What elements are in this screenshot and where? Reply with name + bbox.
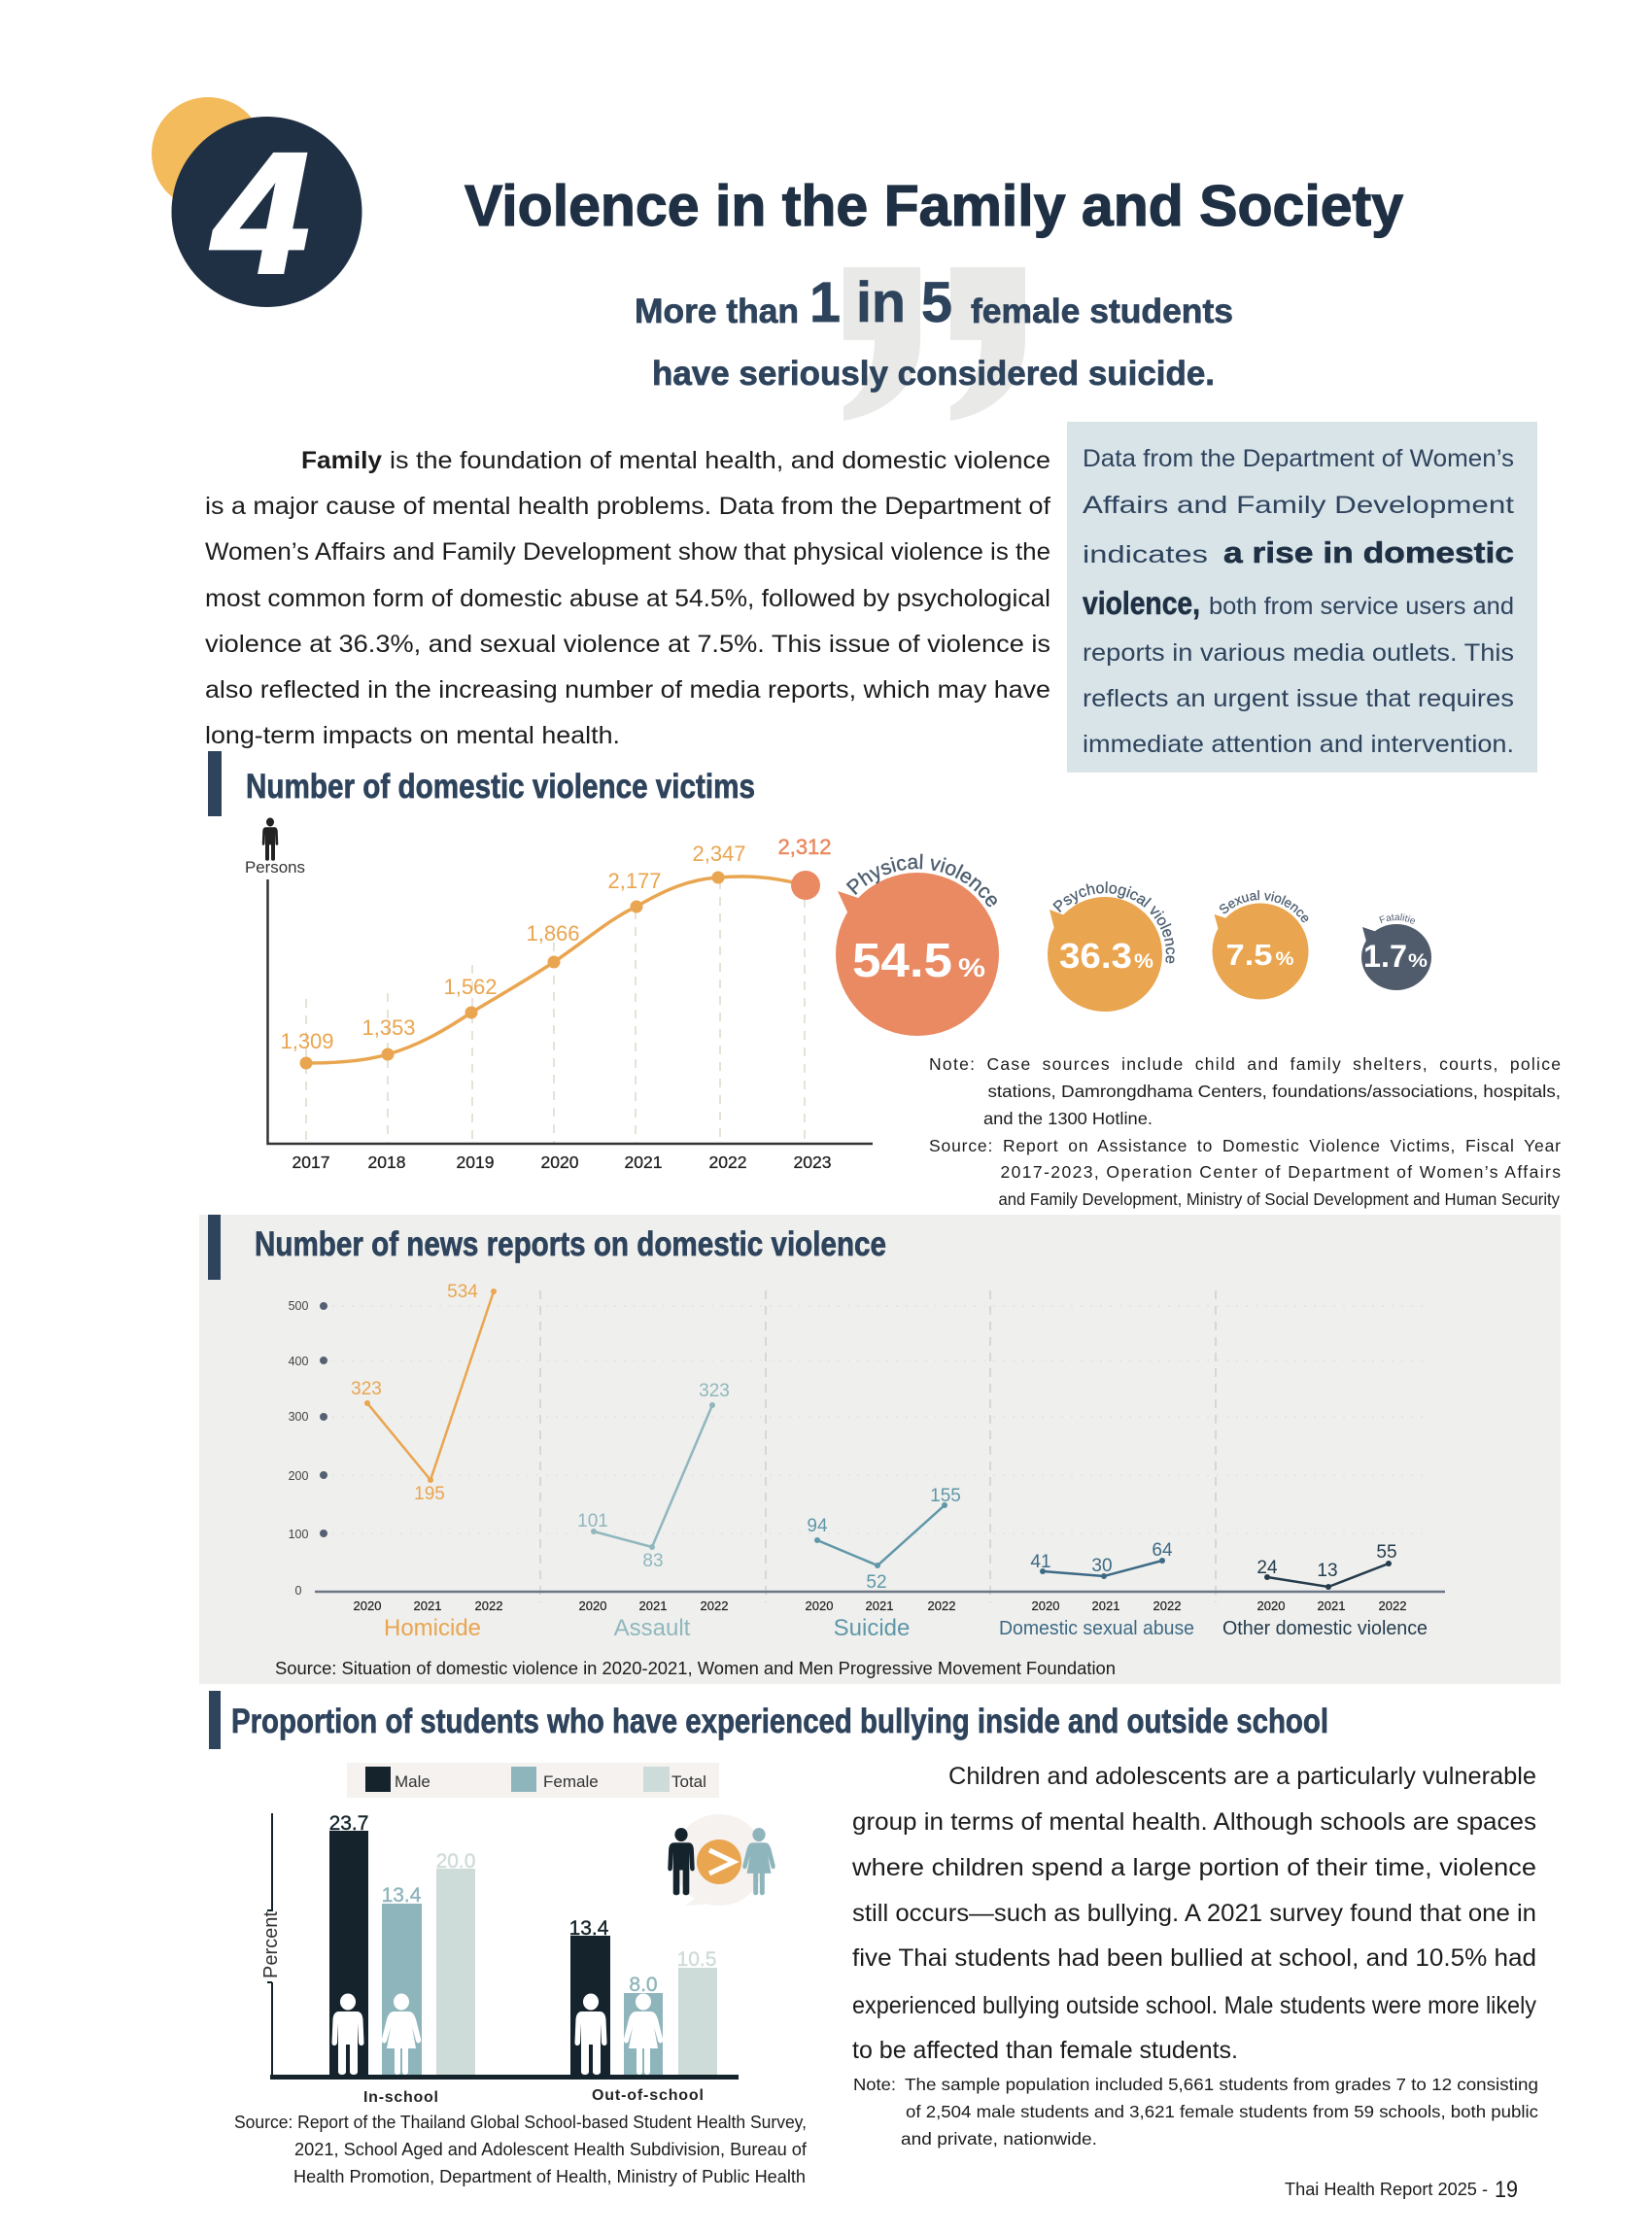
intro paragraph: Family bbox=[301, 447, 382, 474]
bubble: fatalities bbox=[1361, 913, 1431, 990]
paragraph: bullying bbox=[851, 1763, 1536, 2064]
y axis: 100 bbox=[289, 1528, 308, 1541]
y axis: 500 bbox=[289, 1299, 308, 1313]
value labels: 20.0 bbox=[436, 1850, 475, 1873]
y axis: 200 bbox=[289, 1469, 308, 1483]
note and source: victims: and Family Development, Ministry of Social Development and Human Security bbox=[999, 1189, 1560, 1209]
note: bullying: and private, nationwide. bbox=[901, 2129, 1097, 2149]
trend line bbox=[306, 877, 806, 1063]
data labels bbox=[280, 835, 832, 1053]
year labels: 2020 bbox=[806, 1599, 833, 1613]
year labels: 2020 bbox=[541, 1152, 579, 1172]
series: other domestic violence: 13 bbox=[1317, 1561, 1338, 1581]
page footer: 19 bbox=[1495, 2177, 1518, 2203]
series: assault bbox=[577, 1381, 730, 1641]
callout box: both from service users and bbox=[1209, 593, 1514, 620]
value labels: 8.0 bbox=[629, 1974, 658, 1996]
paragraph: bullying: where children spend a large portion of their time, violence bbox=[851, 1854, 1536, 1881]
paragraph: bullying: Children and adolescents are a particularly vulnerable bbox=[948, 1763, 1536, 1790]
series: suicide: Suicide bbox=[834, 1615, 910, 1641]
callout box bbox=[1067, 422, 1537, 773]
bubble: sexual violence: Sexual violence bbox=[1219, 890, 1308, 923]
data labels: 1,309 bbox=[280, 1029, 334, 1053]
series: domestic sexual abuse: 64 bbox=[1152, 1540, 1173, 1561]
icon: male greater than female bbox=[668, 1814, 775, 1906]
intro paragraph: Women’s Affairs and Family Development show that physical violence is the bbox=[205, 538, 1050, 566]
data labels: 1,562 bbox=[443, 975, 498, 999]
year labels: 2017 bbox=[293, 1152, 329, 1172]
series: homicide: 323 bbox=[351, 1379, 382, 1399]
axis label: persons: Persons bbox=[245, 858, 305, 877]
year labels: 2022 bbox=[701, 1599, 728, 1613]
callout box: a rise in domestic bbox=[1223, 535, 1514, 569]
series: suicide: 94 bbox=[807, 1516, 828, 1536]
series: domestic sexual abuse: 41 bbox=[1030, 1552, 1051, 1572]
year labels: 2021 bbox=[866, 1599, 893, 1613]
intro paragraph: is the foundation of mental health, and domestic violence bbox=[390, 447, 1050, 474]
data labels: 1,866 bbox=[526, 921, 580, 946]
intro paragraph: is a major cause of mental health problems. Data from the Department of bbox=[205, 493, 1050, 520]
intro paragraph bbox=[205, 447, 1050, 749]
intro paragraph: also reflected in the increasing number of media reports, which may have bbox=[205, 676, 1050, 704]
year labels: 2021 bbox=[1092, 1599, 1119, 1613]
callout box: immediate attention and intervention. bbox=[1083, 731, 1514, 758]
callout box: Data from the Department of Women’s bbox=[1083, 445, 1514, 472]
icon: person bbox=[262, 817, 278, 861]
section heading: victims bbox=[208, 751, 755, 816]
note and source: victims: 2017-2023, Operation Center of Department of Women’s Affairs bbox=[1001, 1162, 1561, 1182]
headline statistic bbox=[635, 271, 1233, 393]
year labels: 2020 bbox=[1032, 1599, 1059, 1613]
data labels: 1,353 bbox=[361, 1015, 416, 1040]
bubble: fatalities: % bbox=[1408, 951, 1428, 972]
paragraph: bullying: to be affected than female students. bbox=[852, 2037, 1238, 2064]
data labels: 2,177 bbox=[607, 869, 662, 893]
series: homicide: 195 bbox=[414, 1484, 445, 1504]
chapter number badge bbox=[152, 97, 361, 309]
series: domestic sexual abuse: 30 bbox=[1091, 1556, 1113, 1576]
value labels: 23.7 bbox=[329, 1812, 368, 1835]
year labels: 2022 bbox=[709, 1152, 746, 1172]
legend: Female bbox=[543, 1772, 599, 1791]
bubble: sexual violence bbox=[1213, 890, 1308, 999]
series: homicide: 534 bbox=[447, 1282, 478, 1302]
intro paragraph: most common form of domestic abuse at 54.5%, followed by psychological bbox=[205, 585, 1050, 612]
axis label: percent: Percent bbox=[260, 1911, 282, 1978]
note: bullying: of 2,504 male students and 3,621 female students from 59 schools, both public bbox=[906, 2102, 1538, 2121]
series: other domestic violence bbox=[1222, 1542, 1428, 1639]
y axis: 0 bbox=[295, 1584, 302, 1598]
bubble: psychological violence: 36.3 bbox=[1059, 936, 1132, 976]
series: other domestic violence: 24 bbox=[1256, 1558, 1278, 1578]
section heading: news reports: Number of news reports on domestic violence bbox=[255, 1225, 886, 1263]
section heading: news reports bbox=[208, 1215, 886, 1280]
year labels: 2021 bbox=[625, 1152, 662, 1172]
bubble: physical violence: 54.5 bbox=[852, 935, 952, 987]
bubble: sexual violence: 7.5 bbox=[1226, 938, 1273, 972]
data labels: 2,312 bbox=[777, 835, 832, 859]
year labels: 2023 bbox=[794, 1152, 831, 1172]
panel: news reports bbox=[199, 1215, 1561, 1684]
y axis: 300 bbox=[289, 1410, 308, 1424]
series: other domestic violence: 55 bbox=[1376, 1542, 1397, 1563]
paragraph: bullying: group in terms of mental health. Although schools are spaces bbox=[852, 1808, 1536, 1836]
bubble: fatalities: 1.7 bbox=[1363, 939, 1407, 974]
page footer bbox=[1285, 2177, 1518, 2203]
year labels: 2022 bbox=[928, 1599, 955, 1613]
year labels: 2020 bbox=[579, 1599, 606, 1613]
callout box: violence, bbox=[1083, 585, 1200, 621]
intro paragraph: violence at 36.3%, and sexual violence at 7.5%. This issue of violence is bbox=[205, 631, 1050, 658]
year labels: 2021 bbox=[1318, 1599, 1345, 1613]
value labels bbox=[329, 1812, 716, 1996]
note and source: victims: and the 1300 Hotline. bbox=[983, 1109, 1153, 1128]
value labels: 13.4 bbox=[382, 1884, 422, 1907]
group labels: In-school bbox=[363, 2089, 438, 2106]
year labels: 2019 bbox=[457, 1152, 494, 1172]
bubble: psychological violence bbox=[1048, 881, 1175, 1012]
year labels: 2022 bbox=[1153, 1599, 1181, 1613]
year labels: 2022 bbox=[475, 1599, 502, 1613]
intro paragraph: long-term impacts on mental health. bbox=[205, 722, 620, 749]
note: bullying: Note: bbox=[853, 2075, 896, 2094]
year labels: 2021 bbox=[414, 1599, 441, 1613]
series: suicide bbox=[807, 1486, 961, 1641]
source: bullying: Source: Report of the Thailand Global School-based Student Health Survey, bbox=[234, 2113, 807, 2132]
source: news reports: Source: Situation of domestic violence in 2020-2021, Women and Men Progressive Movement Foundation bbox=[275, 1659, 1116, 1678]
legend bbox=[347, 1763, 719, 1798]
title: Violence in the Family and Society bbox=[465, 174, 1403, 238]
bubble: sexual violence: % bbox=[1275, 949, 1294, 970]
series: homicide: Homicide bbox=[384, 1615, 481, 1641]
decorative quotation mark bbox=[843, 267, 1025, 421]
headline statistic: More than bbox=[635, 292, 799, 330]
series: suicide: 52 bbox=[866, 1572, 887, 1593]
bubble: psychological violence: % bbox=[1134, 950, 1153, 973]
note and source: victims bbox=[929, 1054, 1561, 1209]
bubble: physical violence: Physical violence bbox=[845, 853, 997, 908]
note: bullying bbox=[853, 2075, 1538, 2149]
series: assault: 323 bbox=[699, 1381, 730, 1401]
series: other domestic violence: Other domestic violence bbox=[1222, 1618, 1428, 1639]
source: bullying: Health Promotion, Department of Health, Ministry of Public Health bbox=[293, 2167, 806, 2186]
callout box: reflects an urgent issue that requires bbox=[1083, 685, 1514, 712]
group labels: Out-of-school bbox=[592, 2087, 704, 2104]
value labels: 13.4 bbox=[569, 1917, 609, 1940]
series: assault: 83 bbox=[642, 1551, 664, 1571]
note and source: victims: stations, Damrongdhama Centers, foundations/associations, hospitals, bbox=[987, 1082, 1561, 1101]
data labels: 2,347 bbox=[692, 842, 746, 866]
note and source: victims: Source: Report on Assistance to Domestic Violence Victims, Fiscal Year bbox=[929, 1136, 1561, 1155]
year labels: 2018 bbox=[368, 1152, 405, 1172]
section heading: victims: Number of domestic violence victims bbox=[246, 768, 755, 806]
series: domestic sexual abuse: Domestic sexual abuse bbox=[999, 1618, 1194, 1639]
bubble: physical violence bbox=[836, 853, 999, 1036]
y axis: 400 bbox=[289, 1355, 308, 1368]
series: domestic sexual abuse bbox=[999, 1540, 1194, 1639]
chapter number badge: 4 bbox=[211, 119, 309, 309]
paragraph: bullying: still occurs—such as bullying. A 2021 survey found that one in bbox=[852, 1900, 1536, 1927]
line chart: domestic violence victims bbox=[245, 817, 873, 1172]
source: bullying bbox=[234, 2113, 808, 2186]
headline statistic: 1 in 5 bbox=[809, 271, 952, 334]
paragraph: bullying: five Thai students had been bullied at school, and 10.5% had bbox=[852, 1944, 1536, 1972]
bubble: physical violence: % bbox=[958, 953, 985, 982]
section heading: bullying bbox=[209, 1691, 1328, 1749]
source: bullying: 2021, School Aged and Adolescent Health Subdivision, Bureau of bbox=[294, 2140, 808, 2159]
section heading: bullying: Proportion of students who have experienced bullying inside and outside school bbox=[231, 1702, 1328, 1740]
paragraph: bullying: experienced bullying outside school. Male students were more likely bbox=[852, 1992, 1536, 2019]
white person icons bbox=[332, 1994, 663, 2075]
page footer: Thai Health Report 2025 - bbox=[1285, 2180, 1488, 2199]
group labels bbox=[363, 2087, 704, 2106]
value labels: 10.5 bbox=[677, 1948, 716, 1971]
series: assault: Assault bbox=[614, 1615, 691, 1641]
year labels: 2020 bbox=[1257, 1599, 1285, 1613]
series: homicide bbox=[351, 1282, 497, 1641]
bar chart: bullying bbox=[260, 1812, 739, 2106]
note and source: victims: Note: Case sources include child and family shelters, courts, police bbox=[929, 1054, 1561, 1074]
callout box: Affairs and Family Development bbox=[1083, 492, 1514, 519]
series: assault: 101 bbox=[577, 1511, 608, 1531]
legend: Male bbox=[395, 1772, 430, 1791]
year labels: 2022 bbox=[1379, 1599, 1406, 1613]
y axis bbox=[289, 1299, 1445, 1598]
bubble: psychological violence: Psychological violence bbox=[1052, 881, 1175, 964]
legend: Total bbox=[671, 1772, 706, 1791]
callout box: reports in various media outlets. This bbox=[1083, 639, 1514, 667]
year labels: 2021 bbox=[639, 1599, 667, 1613]
headline statistic: female students bbox=[971, 292, 1233, 330]
series: suicide: 155 bbox=[930, 1486, 961, 1506]
year labels: 2020 bbox=[354, 1599, 381, 1613]
callout box: indicates bbox=[1083, 541, 1208, 568]
headline statistic: have seriously considered suicide. bbox=[652, 355, 1215, 393]
note: bullying: The sample population included 5,661 students from grades 7 to 12 consisting bbox=[905, 2075, 1538, 2094]
year labels bbox=[354, 1599, 1406, 1613]
year labels bbox=[293, 1152, 831, 1172]
